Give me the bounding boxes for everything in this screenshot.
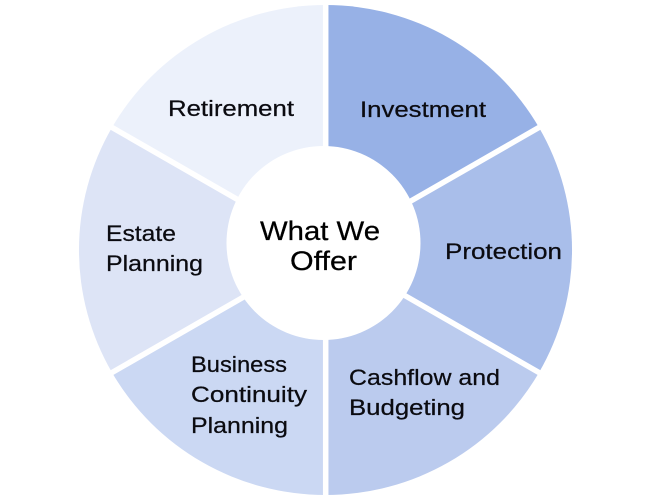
label: business continuity planning: Business [191, 352, 287, 377]
centre title: Offer [290, 246, 357, 276]
segment: business continuity planning [112, 250, 326, 495]
label: investment: Investment [360, 97, 487, 122]
segment: investment [326, 5, 539, 250]
label: business continuity planning: Continuity [191, 382, 308, 407]
segment: cashflow and budgeting [326, 250, 539, 495]
centre title: What We [260, 216, 380, 246]
label: cashflow and budgeting: Cashflow and [349, 365, 500, 390]
centre hub: what we offer [226, 146, 420, 340]
label: protection: Protection [445, 239, 562, 264]
label: cashflow and budgeting: Budgeting [349, 395, 465, 420]
segment: protection [326, 128, 572, 372]
label: estate planning: Estate [106, 221, 176, 246]
segment: estate planning [79, 128, 326, 372]
label: business continuity planning: Planning [191, 413, 288, 438]
segment: retirement [112, 5, 326, 250]
label: estate planning: Planning [106, 251, 203, 276]
label: retirement: Retirement [168, 96, 295, 121]
